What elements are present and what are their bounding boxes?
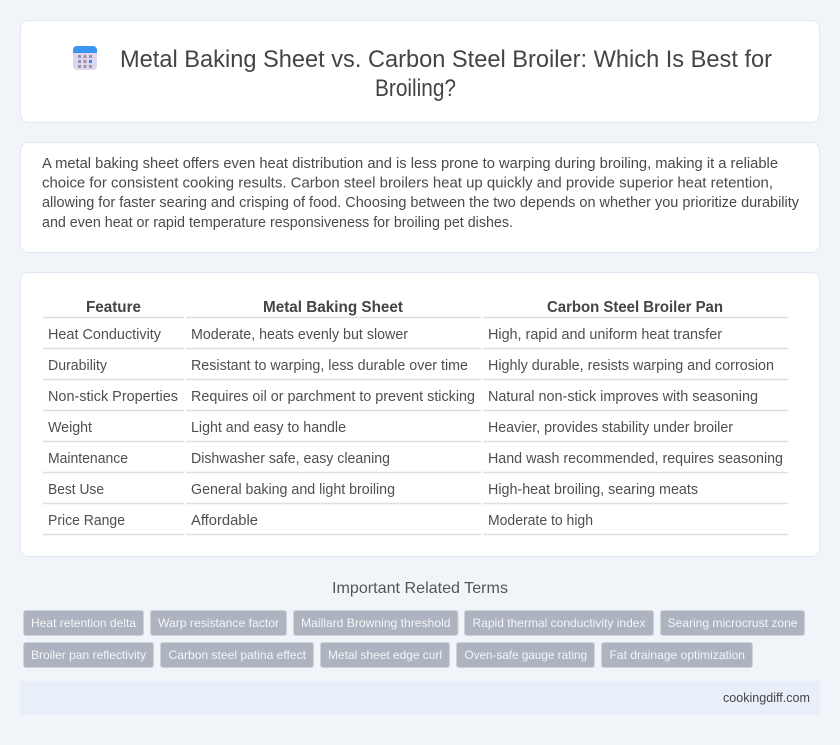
table header: Carbon Steel Broiler Pan — [547, 299, 723, 316]
related term tags: Searing microcrust zone — [668, 616, 798, 630]
summary text — [42, 156, 800, 231]
row: maintenance: Hand wash recommended, requires seasoning — [488, 451, 783, 467]
row: price range: Price Range — [48, 513, 125, 529]
row: weight: Weight — [48, 420, 92, 436]
related term tags: Broiler pan reflectivity — [31, 648, 146, 662]
related term tags: Heat retention delta — [31, 616, 136, 630]
panel: summary — [20, 142, 820, 252]
related term tags — [24, 610, 804, 668]
title: Metal Baking Sheet vs. Carbon Steel Broiler: Which Is Best for — [120, 46, 772, 73]
related term tags: Warp resistance factor — [158, 616, 279, 630]
row: best use: General baking and light broiling — [191, 482, 395, 498]
row: price range: Moderate to high — [488, 513, 593, 529]
summary text: allowing for faster searing and crisping of food. Choosing between the two depends on whether you prioritize durability — [42, 195, 800, 211]
row: price range: Affordable — [191, 513, 258, 529]
related term tags: Metal sheet edge curl — [328, 648, 442, 662]
row: durability — [48, 358, 774, 374]
row: non-stick: Non-stick Properties — [48, 389, 178, 405]
row: best use: Best Use — [48, 482, 104, 498]
row: best use — [48, 482, 698, 498]
row: heat conductivity: Heat Conductivity — [48, 327, 162, 343]
row: best use: High-heat broiling, searing meats — [488, 482, 698, 498]
table header: Feature — [86, 299, 141, 316]
related term tags: Fat drainage optimization — [610, 648, 745, 662]
row: heat conductivity: Moderate, heats evenly but slower — [191, 327, 408, 343]
summary text: A metal baking sheet offers even heat distribution and is less prone to warping during broiling, making it a reliable — [42, 156, 778, 172]
heading: related terms: Important Related Terms — [332, 580, 508, 597]
row: non-stick: Requires oil or parchment to prevent sticking — [191, 389, 475, 405]
related term tags: Carbon steel patina effect — [168, 648, 307, 662]
row: durability: Durability — [48, 358, 108, 374]
row: durability: Highly durable, resists warping and corrosion — [488, 358, 774, 374]
summary text: choice for consistent cooking results. Carbon steel broilers heat up quickly and provide superior heat retention, — [42, 176, 773, 192]
table header: Metal Baking Sheet — [263, 299, 403, 316]
row: weight: Heavier, provides stability under broiler — [488, 420, 733, 436]
row: weight: Light and easy to handle — [191, 420, 346, 436]
icon: calendar — [73, 46, 97, 70]
row: maintenance — [48, 451, 783, 467]
footer — [20, 681, 820, 715]
row: price range — [48, 513, 593, 529]
row: non-stick — [48, 389, 758, 405]
panel: comparison table — [20, 272, 820, 556]
row: heat conductivity — [48, 327, 722, 343]
title — [120, 46, 772, 102]
row: heat conductivity: High, rapid and uniform heat transfer — [488, 327, 722, 343]
related term tags: Maillard Browning threshold — [301, 616, 450, 630]
table header — [86, 299, 723, 316]
row: non-stick: Natural non-stick improves with seasoning — [488, 389, 758, 405]
summary text: and even heat or rapid temperature responsiveness for broiling pet dishes. — [42, 215, 513, 231]
row: maintenance: Maintenance — [48, 451, 128, 467]
footer: cookingdiff.com — [723, 691, 810, 705]
row: weight — [48, 420, 733, 436]
panel: title card — [20, 20, 820, 122]
row: durability: Resistant to warping, less durable over time — [191, 358, 468, 374]
related term tags: Oven-safe gauge rating — [464, 648, 587, 662]
related term tags: Rapid thermal conductivity index — [472, 616, 646, 630]
row: maintenance: Dishwasher safe, easy cleaning — [191, 451, 390, 467]
title: Broiling? — [375, 75, 456, 102]
